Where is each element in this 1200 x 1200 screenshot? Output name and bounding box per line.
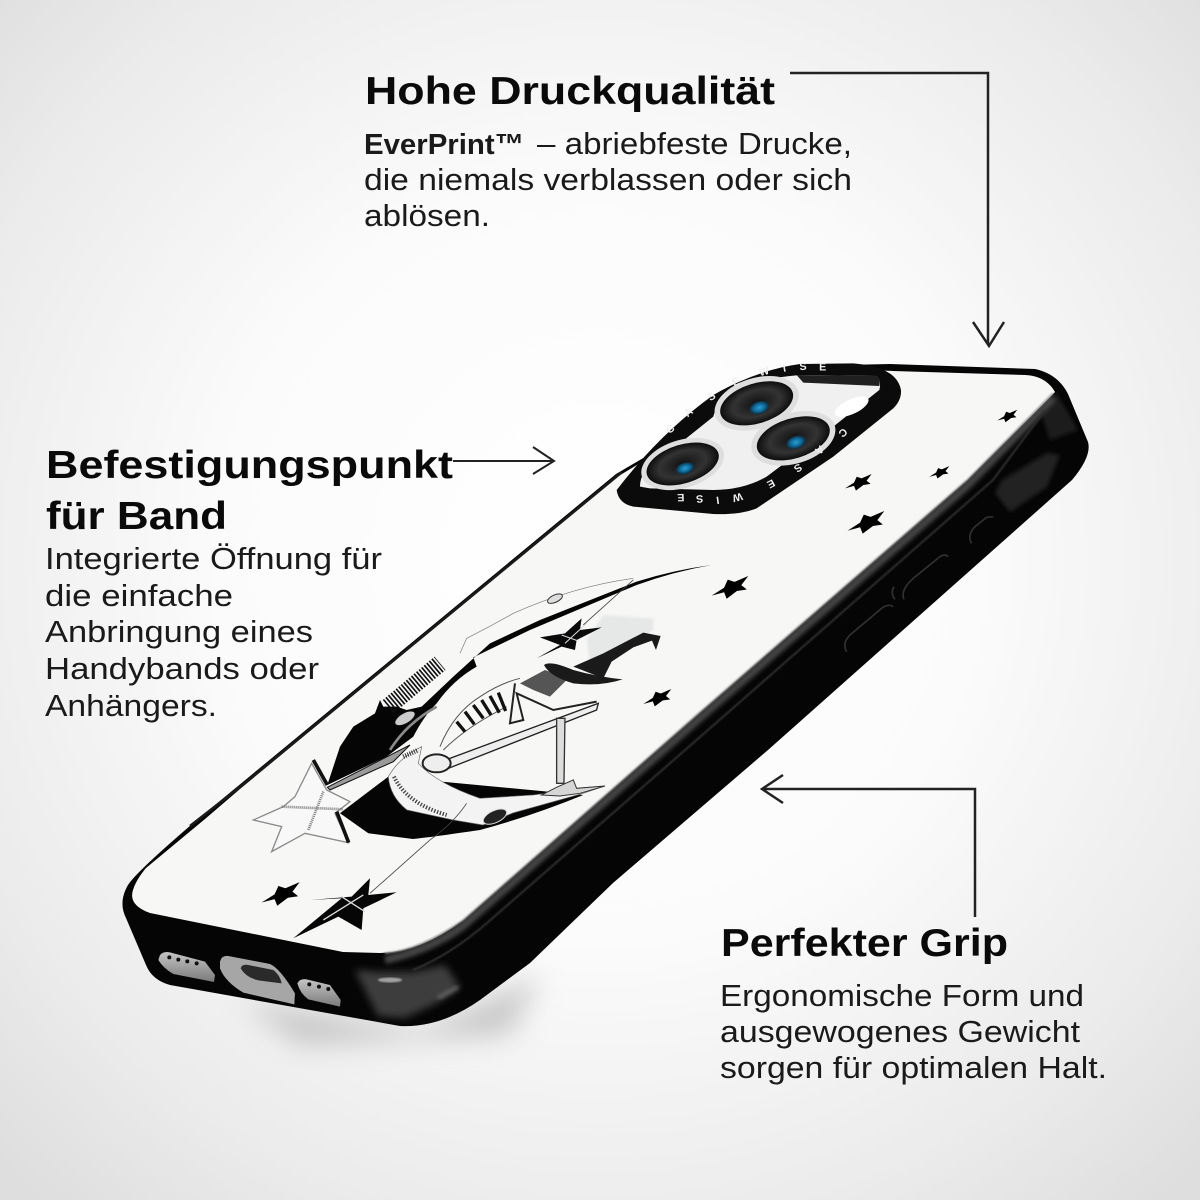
artwork: stars near camera <box>845 410 1017 534</box>
drop shadow <box>240 975 540 1045</box>
side buttons <box>845 517 993 652</box>
camera module <box>617 361 901 514</box>
text: print quality description: ablösen. <box>364 198 490 233</box>
brand text top: A <box>682 405 696 420</box>
arrow: grip <box>762 775 975 917</box>
text: grip description: sorgen für optimalen Halt. <box>720 1050 1107 1085</box>
brand text top: E <box>819 362 826 374</box>
text: print quality description: – abriebfeste Drucke, <box>537 126 852 161</box>
text: strap description <box>45 541 382 723</box>
moon upper hatching <box>388 578 633 750</box>
phone illustration <box>122 361 1089 1045</box>
brand text bottom: W <box>730 490 744 504</box>
lens left <box>635 429 730 499</box>
arrow: print quality <box>790 73 1004 346</box>
text: strap description: Integrierte Öffnung für <box>45 541 382 576</box>
bottom ports <box>158 952 341 1007</box>
heading: print quality: Hohe Druckqualität <box>365 70 775 113</box>
brand text top: S <box>706 390 718 404</box>
text: grip description: ausgewogenes Gewicht <box>720 1014 1080 1049</box>
arrow: strap attachment <box>453 447 554 474</box>
right speaker <box>297 979 341 1007</box>
brand text top: W <box>758 365 772 379</box>
text: print quality description: EverPrint™ <box>364 129 524 161</box>
brand text bottom: I <box>715 493 720 506</box>
brand text bottom: A <box>812 443 826 457</box>
camera opening <box>640 375 880 490</box>
brand text top: I <box>782 363 787 375</box>
star with cross <box>537 618 602 658</box>
text: strap description: die einfache <box>45 578 233 613</box>
brand text top: C <box>664 422 678 436</box>
lens top <box>708 366 805 440</box>
charging port <box>220 956 295 1004</box>
brand text bottom <box>677 425 849 506</box>
text: strap description: Handybands oder <box>45 651 319 686</box>
brand text bottom: S <box>791 460 804 474</box>
skeleton ribcage <box>440 670 597 750</box>
text: print quality description <box>364 126 852 233</box>
text: strap description: Anbringung eines <box>45 614 313 649</box>
brand text top: S <box>799 361 807 373</box>
white back face <box>132 366 1055 953</box>
outlined star <box>253 760 350 852</box>
brand text bottom: E <box>677 491 685 503</box>
heading: strap attachment: Befestigungspunkt <box>46 444 453 487</box>
moon upper crescent <box>327 565 712 785</box>
smoke mist <box>587 615 653 663</box>
heading: strap attachment: für Band <box>46 495 227 538</box>
skeleton leg <box>542 718 605 796</box>
moon lower crescent <box>340 777 583 839</box>
left speaker <box>158 952 215 982</box>
callout: strap attachment <box>45 444 554 723</box>
brand text top <box>664 361 826 436</box>
artwork: skeleton on moon <box>253 565 748 938</box>
brand text bottom: S <box>696 492 704 505</box>
text: strap description: Anhängers. <box>45 688 217 723</box>
heading: grip: Perfekter Grip <box>721 922 1008 965</box>
large star <box>293 878 397 938</box>
text: print quality description: die niemals verblassen oder sich <box>364 162 852 197</box>
phone case body <box>122 364 1089 1026</box>
text: grip description <box>720 978 1107 1085</box>
lens right <box>744 401 842 475</box>
side edge shading <box>355 392 1078 1018</box>
small stars <box>262 576 748 906</box>
heading: strap attachment <box>46 444 453 538</box>
brand text top: E <box>730 375 742 389</box>
witch hat <box>544 633 661 684</box>
brand text bottom: C <box>836 425 849 440</box>
text: grip description: Ergonomische Form und <box>720 978 1084 1013</box>
tether lines <box>370 580 633 893</box>
scythe <box>327 703 598 790</box>
left rim line <box>190 472 622 826</box>
brand text bottom: E <box>765 476 777 490</box>
camera bump frame <box>617 363 901 514</box>
callout: grip <box>720 775 1107 1085</box>
callout: print quality <box>364 70 1004 346</box>
